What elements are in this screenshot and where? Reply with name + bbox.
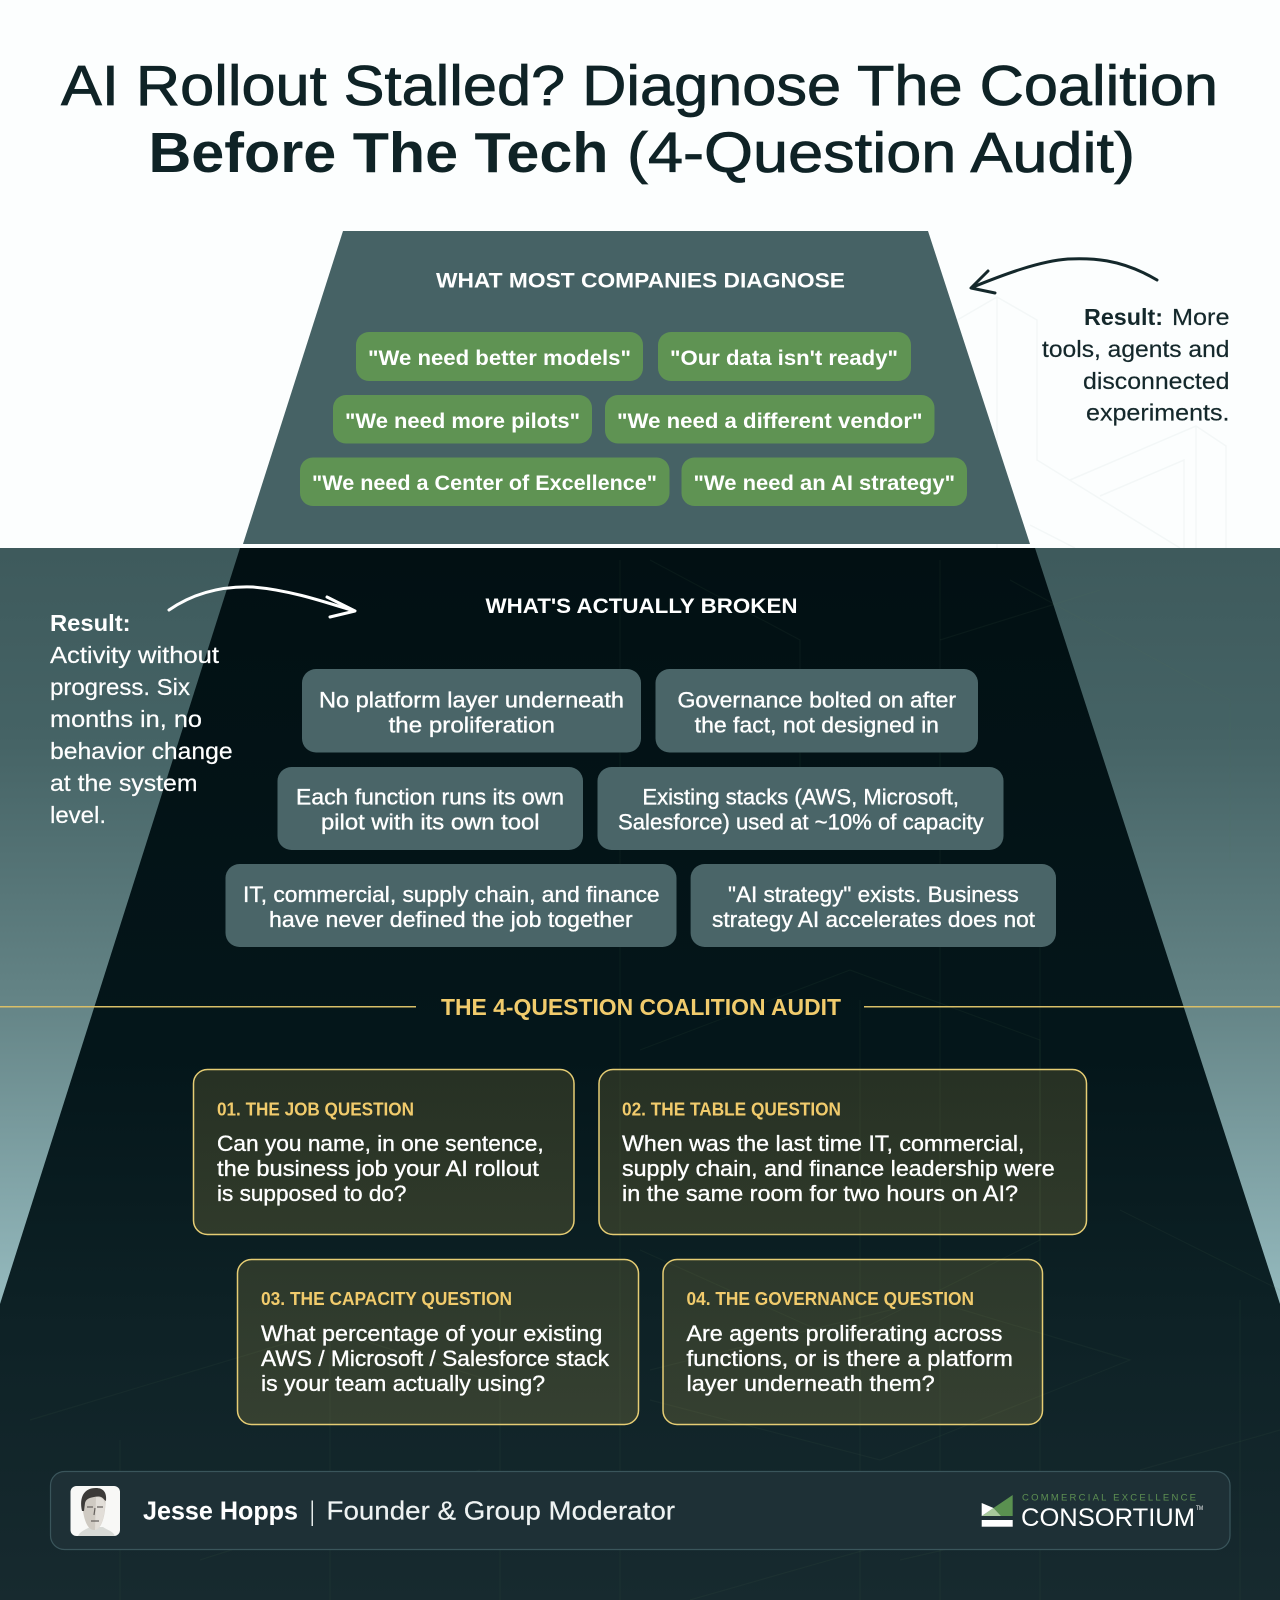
card: job question: is supposed to do? bbox=[217, 1181, 406, 1206]
card: table question: supply chain, and finance leadership were bbox=[622, 1156, 1055, 1181]
box: existing stacks: Salesforce) used at ~10% of capacity bbox=[618, 810, 984, 834]
faint building lines, light area bbox=[940, 297, 1226, 548]
box: platform layer: the proliferation bbox=[389, 712, 555, 738]
callout: lower result: at the system bbox=[50, 770, 198, 796]
callout: lower result: progress. Six bbox=[50, 674, 191, 700]
pill: center of excellence: "We need a Center of Excellence" bbox=[312, 472, 657, 495]
arrow: result to upper pyramid bbox=[971, 259, 1157, 293]
title: Before The Tech bbox=[148, 121, 608, 185]
panel: what's actually broken bbox=[226, 595, 1056, 947]
author role: Founder & Group Moderator bbox=[326, 1496, 675, 1526]
callout: upper result bbox=[1042, 304, 1230, 426]
title bbox=[61, 54, 1218, 185]
card: capacity question: AWS / Microsoft / Salesforce stack bbox=[261, 1346, 610, 1371]
box: AI strategy exists: strategy AI accelerates does not bbox=[712, 907, 1035, 932]
faint building lines, dark area bbox=[30, 560, 1280, 1600]
pill: center of excellence bbox=[300, 458, 670, 506]
box: function pilots: pilot with its own tool bbox=[321, 810, 540, 834]
box: function pilots: Each function runs its own bbox=[296, 784, 564, 810]
pill: AI strategy bbox=[682, 458, 967, 506]
callout: lower result: behavior change bbox=[50, 738, 233, 764]
callout: lower result: Activity without bbox=[50, 642, 220, 668]
footer bar bbox=[50, 1472, 1230, 1550]
card: capacity question bbox=[238, 1260, 638, 1424]
card: job question: the business job your AI rollout bbox=[217, 1156, 539, 1181]
box: never defined bbox=[226, 864, 676, 947]
title: AI Rollout Stalled? Diagnose The Coalition bbox=[61, 54, 1218, 118]
box: AI strategy exists: "AI strategy" exists. Business bbox=[728, 882, 1019, 907]
logo: consortium: TM bbox=[1196, 1506, 1203, 1512]
heading: broken: WHAT'S ACTUALLY BROKEN bbox=[486, 595, 798, 618]
card: governance question: Are agents proliferating across bbox=[686, 1321, 1002, 1346]
pill: vendor: "We need a different vendor" bbox=[617, 410, 922, 433]
box: function pilots bbox=[278, 767, 583, 850]
card: job question: 01. THE JOB QUESTION bbox=[217, 1100, 414, 1120]
callout: lower result: level. bbox=[50, 802, 106, 828]
card: capacity question: What percentage of your existing bbox=[261, 1321, 602, 1346]
card: table question: When was the last time IT, commercial, bbox=[622, 1131, 1024, 1156]
card: job question bbox=[194, 1070, 574, 1234]
card: capacity question: is your team actually using? bbox=[261, 1371, 545, 1396]
lower background bbox=[0, 548, 1280, 1600]
pill: better models: "We need better models" bbox=[368, 347, 631, 370]
box: platform layer: No platform layer underneath bbox=[319, 688, 624, 712]
card: table question bbox=[599, 1070, 1086, 1234]
callout: upper result: Result: bbox=[1084, 304, 1163, 330]
card: job question: Can you name, in one sentence, bbox=[217, 1131, 544, 1156]
box: never defined: have never defined the job together bbox=[269, 907, 633, 932]
card: governance question: functions, or is there a platform bbox=[686, 1346, 1013, 1371]
logo: consortium: CONSORTIUM bbox=[1021, 1504, 1195, 1532]
box: existing stacks: Existing stacks (AWS, Microsoft, bbox=[642, 784, 959, 810]
callout: upper result: experiments. bbox=[1086, 400, 1230, 426]
box: governance: Governance bolted on after bbox=[678, 688, 956, 712]
card: governance question: 04. THE GOVERNANCE QUESTION bbox=[686, 1289, 974, 1309]
callout: upper result: disconnected bbox=[1083, 368, 1230, 394]
box: governance: the fact, not designed in bbox=[695, 712, 939, 738]
card: table question: in the same room for two hours on AI? bbox=[622, 1181, 1018, 1206]
callout: lower result: Result: bbox=[50, 610, 131, 636]
card: table question: 02. THE TABLE QUESTION bbox=[622, 1100, 841, 1120]
pill: better models bbox=[356, 332, 643, 381]
callout: lower result bbox=[50, 610, 233, 828]
arrow: result to broken bbox=[169, 587, 355, 617]
author name: Jesse Hopps bbox=[143, 1496, 298, 1526]
box: AI strategy exists bbox=[691, 864, 1056, 947]
logo: consortium: COMMERCIAL EXCELLENCE bbox=[1022, 1493, 1196, 1504]
pill: pilots: "We need more pilots" bbox=[345, 410, 580, 433]
panel: what most companies diagnose bbox=[243, 231, 1030, 544]
card: governance question bbox=[663, 1260, 1042, 1424]
box: existing stacks bbox=[598, 767, 1004, 850]
pill: data: "Our data isn't ready" bbox=[670, 347, 898, 370]
box: never defined: IT, commercial, supply chain, and finance bbox=[243, 882, 660, 907]
upper pyramid bbox=[243, 231, 1030, 544]
heading: diagnose: WHAT MOST COMPANIES DIAGNOSE bbox=[436, 270, 845, 292]
pill: AI strategy: "We need an AI strategy" bbox=[694, 472, 955, 495]
pill: pilots bbox=[333, 395, 592, 444]
box: platform layer bbox=[302, 669, 641, 752]
box: governance bbox=[656, 669, 978, 752]
pyramid side: right bbox=[1035, 548, 1280, 1304]
card: governance question: layer underneath them? bbox=[686, 1371, 935, 1396]
title: (4-Question Audit) bbox=[627, 121, 1135, 185]
divider heading: coalition audit: THE 4-QUESTION COALITION AUDIT bbox=[441, 994, 841, 1020]
callout: upper result: tools, agents and bbox=[1042, 336, 1230, 362]
callout: upper result: More bbox=[1172, 304, 1230, 330]
callout: lower result: months in, no bbox=[50, 706, 202, 732]
card: capacity question: 03. THE CAPACITY QUESTION bbox=[261, 1289, 512, 1309]
icon: author portrait bbox=[70, 1486, 120, 1536]
pill: data bbox=[658, 332, 911, 381]
pill: vendor bbox=[605, 395, 934, 444]
logo: consortium bbox=[982, 1493, 1203, 1532]
pyramid side: left bbox=[0, 548, 240, 1304]
